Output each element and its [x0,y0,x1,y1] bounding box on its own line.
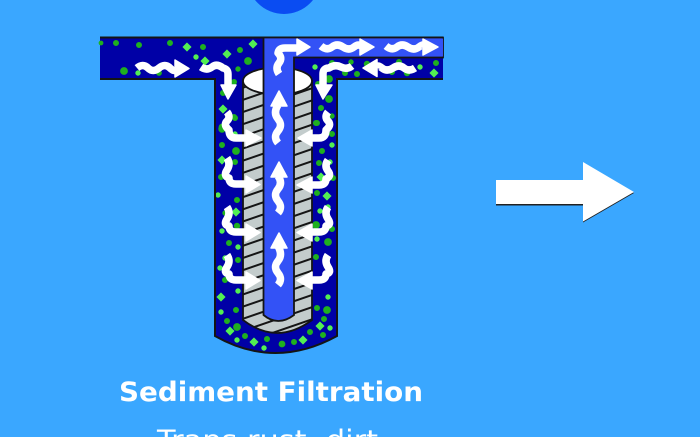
heading: Sediment Filtration [119,377,423,408]
inlet flow arrows [137,60,415,99]
filtering flow arrows right [297,112,330,289]
outlet flow arrows [271,39,438,285]
housing outline [100,38,443,353]
sediment particles [99,40,439,350]
outlet pipe right edge cover [440,38,443,56]
filter diagram [99,38,443,353]
filter housing [100,38,443,353]
step circle badge [247,0,321,14]
filtering flow arrows left [225,112,261,289]
clean water outlet tube [264,38,443,321]
next step arrow [496,162,634,222]
cartridge top opening [243,68,312,94]
hatched filter cartridge [243,81,312,333]
